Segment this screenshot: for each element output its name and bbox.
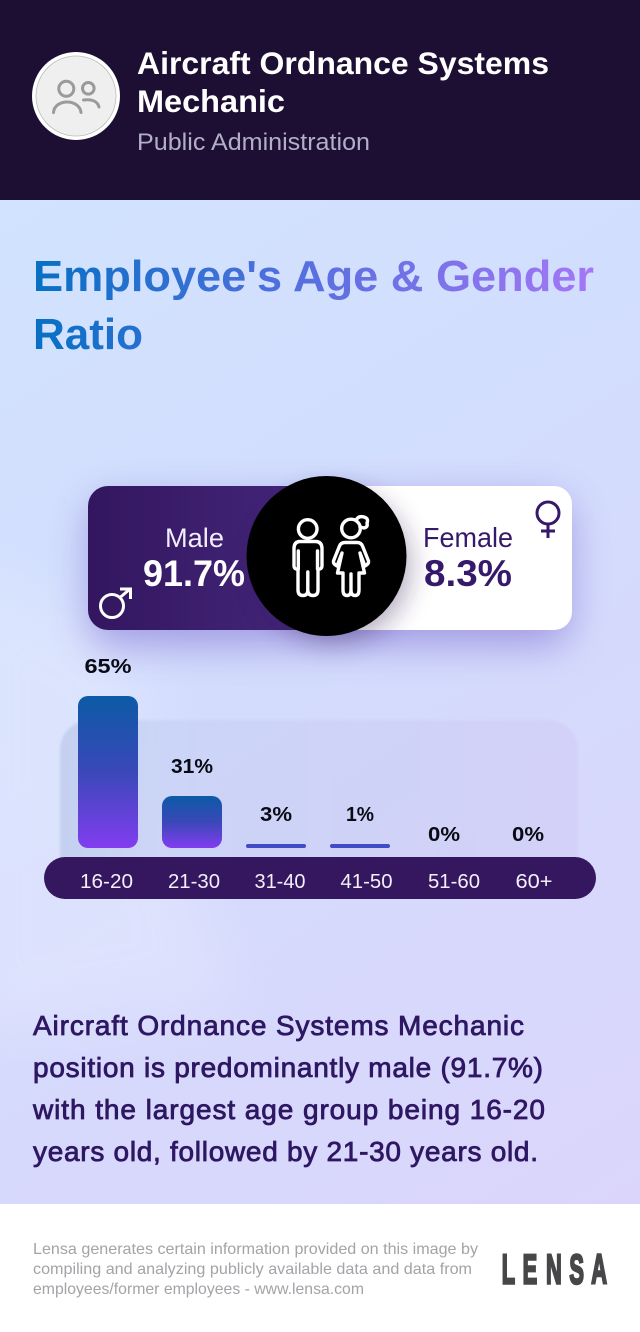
heading: Employee's Age & Gender [33, 252, 594, 301]
shadow beneath gender card [90, 500, 570, 645]
job title: Mechanic [137, 83, 285, 119]
age axis pill: 21-30 [168, 870, 220, 893]
job title [137, 45, 549, 119]
bar 16-20 [78, 656, 138, 848]
logo: LENSA [502, 1247, 607, 1293]
panel: female [300, 486, 572, 630]
age axis pill: 16-20 [80, 870, 133, 893]
summary paragraph: position is predominantly male (91.7%) [33, 1052, 543, 1083]
background panel [0, 200, 640, 1204]
disclaimer text [33, 1241, 478, 1298]
disclaimer text: compiling and analyzing publicly available data and data from [33, 1261, 472, 1278]
bar 41-50: 1% [346, 804, 374, 826]
disclaimer text: employees/former employees - www.lensa.com [33, 1281, 364, 1298]
summary paragraph: years old, followed by 21-30 years old. [33, 1136, 538, 1167]
circle shadow [258, 490, 410, 642]
bar chart plate [60, 720, 578, 890]
panel: male [88, 486, 320, 630]
icon: figures in black circle [246, 476, 406, 636]
summary paragraph [32, 1010, 545, 1167]
bar 31-40 [246, 804, 306, 848]
industry subtitle: Public Administration [137, 129, 370, 156]
icon: people avatar [32, 52, 120, 140]
value 51-60: 0% [428, 824, 460, 846]
panel: male: 91.7% [143, 553, 245, 594]
age axis pill: 31-40 [254, 870, 306, 893]
bar 16-20: 65% [84, 656, 132, 678]
heading: Ratio [33, 310, 143, 359]
heading [33, 252, 594, 359]
bar 31-40: 3% [260, 804, 292, 826]
footer [0, 1204, 640, 1332]
job title: Aircraft Ordnance Systems [137, 45, 549, 81]
age axis pill: 51-60 [428, 870, 480, 893]
summary paragraph: Aircraft Ordnance Systems Mechanic [33, 1010, 524, 1041]
disclaimer text: Lensa generates certain information provided on this image by [33, 1241, 478, 1258]
age axis pill [44, 857, 596, 899]
bar 41-50 [330, 804, 390, 848]
icon: male symbol [100, 589, 130, 618]
bar chart [44, 656, 596, 899]
summary paragraph: with the largest age group being 16-20 [32, 1094, 545, 1125]
age axis pill: 60+ [516, 870, 552, 893]
bar 21-30 [162, 756, 222, 848]
icon: female symbol [537, 502, 559, 538]
value 60+: 0% [512, 824, 544, 846]
panel: female: Female [423, 522, 513, 553]
panel: male: Male [165, 523, 224, 553]
gender card [88, 476, 572, 642]
age axis pill: 41-50 [340, 870, 392, 893]
header band [0, 0, 640, 200]
panel: female: 8.3% [424, 553, 512, 594]
bar 21-30: 31% [171, 756, 213, 778]
